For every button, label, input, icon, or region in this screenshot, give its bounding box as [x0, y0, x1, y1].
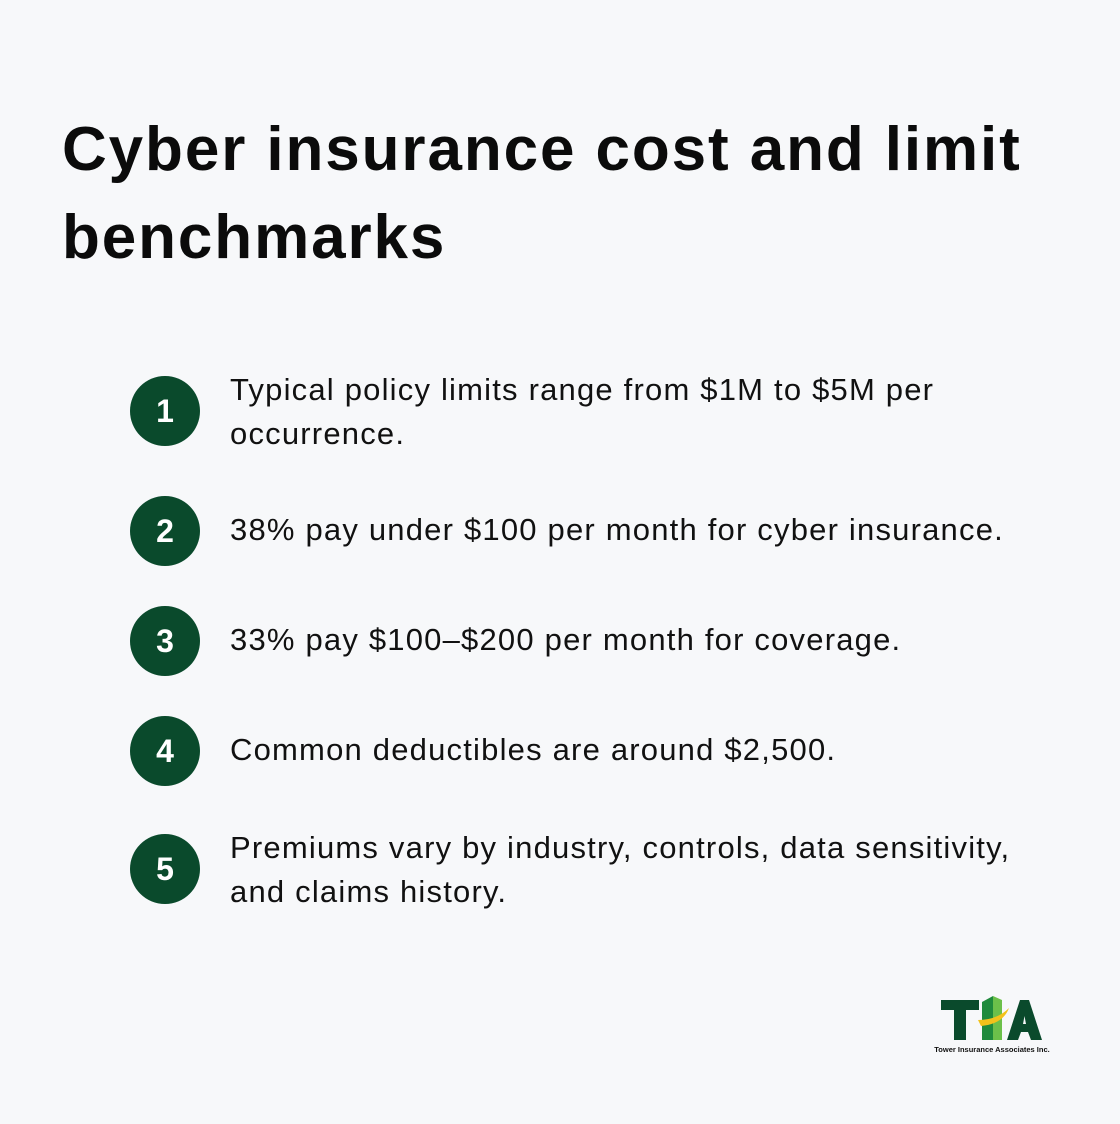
- title: Cyber insurance cost and limit: [62, 115, 1022, 184]
- item 1: [130, 372, 934, 451]
- text 1: Typical policy limits range from $1M to $5M per occurrence.: [230, 372, 934, 451]
- text 2: 38% pay under $100 per month for cyber insurance.: [230, 512, 1004, 547]
- logo tagline: Tower Insurance Associates Inc.: [934, 1045, 1050, 1054]
- text 5: Premiums vary by industry, controls, data sensitivity, and claims history.: [230, 830, 1010, 909]
- text 3: 33% pay $100–$200 per month for coverage.: [230, 622, 901, 657]
- logo T: [941, 1000, 979, 1040]
- logo: [934, 996, 1050, 1054]
- badge 2: [130, 496, 200, 566]
- item 3: [130, 606, 901, 676]
- badge 5: 5: [156, 851, 174, 887]
- badge 1: [130, 376, 200, 446]
- badge 4: [130, 716, 200, 786]
- logo A: [1007, 1000, 1042, 1040]
- item 4: [130, 716, 836, 786]
- item 2: [130, 496, 1004, 566]
- logo tower I: [978, 996, 1009, 1040]
- badge 3: [130, 606, 200, 676]
- badge 2: 2: [156, 513, 174, 549]
- item 5: [130, 830, 1010, 909]
- badge 5: [130, 834, 200, 904]
- badge 1: 1: [156, 393, 174, 429]
- text 4: Common deductibles are around $2,500.: [230, 732, 836, 767]
- title: [62, 115, 1022, 272]
- badge 4: 4: [156, 733, 174, 769]
- badge 3: 3: [156, 623, 174, 659]
- title: benchmarks: [62, 203, 446, 272]
